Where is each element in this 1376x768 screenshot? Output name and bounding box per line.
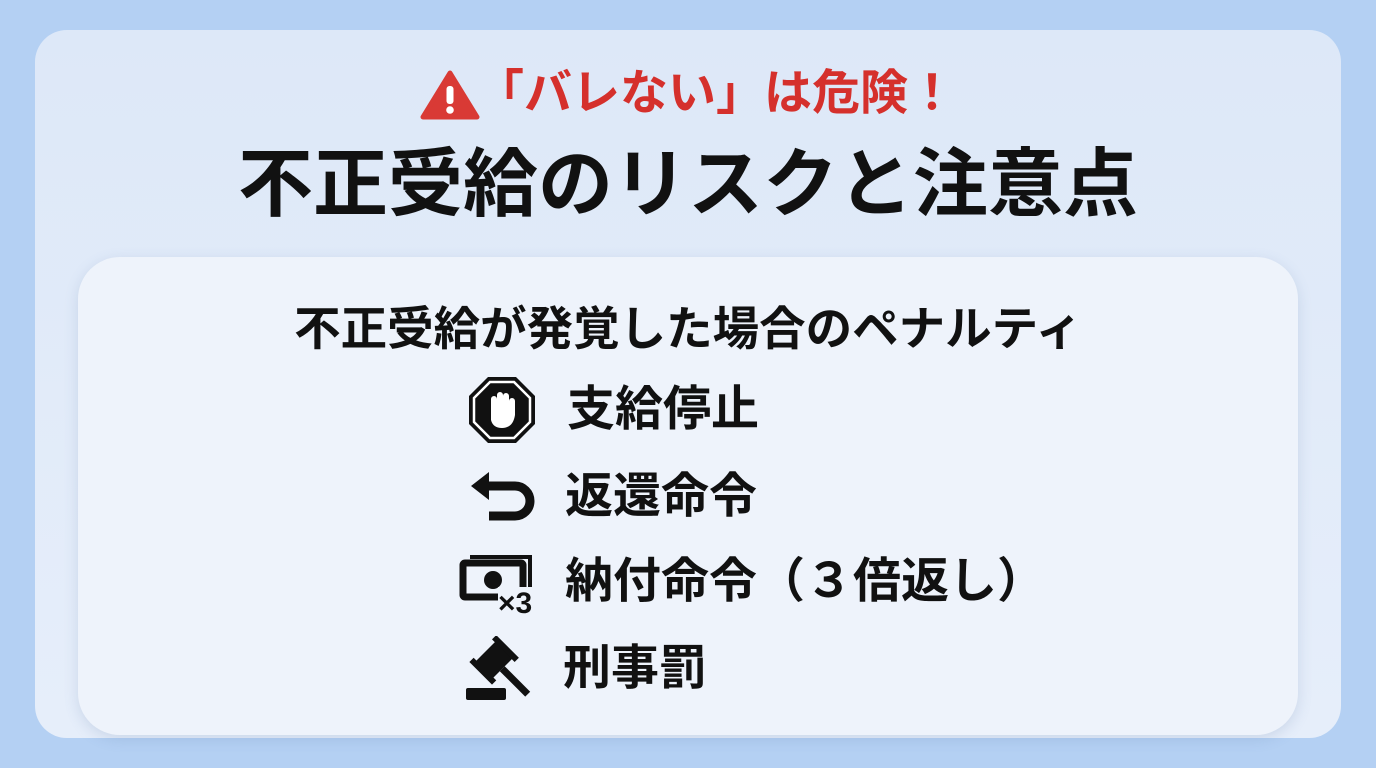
item: 支給停止 [469, 377, 759, 443]
item: 納付命令 [460, 555, 1045, 617]
item: 刑事罰 [466, 636, 707, 700]
label: 返還命令 [565, 470, 757, 523]
item: 返還命令 [471, 470, 757, 523]
label: 納付命令（３倍返し） [565, 555, 1045, 608]
warning text: 「バレない」は危険！ [476, 67, 956, 120]
heading: 不正受給が発覚した場合のペナルティ [294, 303, 1082, 355]
icon: return arrow [471, 472, 534, 520]
icon: warning triangle [420, 70, 480, 120]
warning subtitle [420, 67, 956, 120]
label: 刑事罰 [563, 642, 707, 695]
label: 支給停止 [567, 383, 759, 436]
panel: penalties [78, 257, 1298, 735]
title: 不正受給のリスクと注意点 [238, 142, 1138, 226]
icon: stop hand [469, 377, 535, 443]
icon: money x3 [460, 555, 532, 617]
icon: gavel [466, 636, 530, 700]
